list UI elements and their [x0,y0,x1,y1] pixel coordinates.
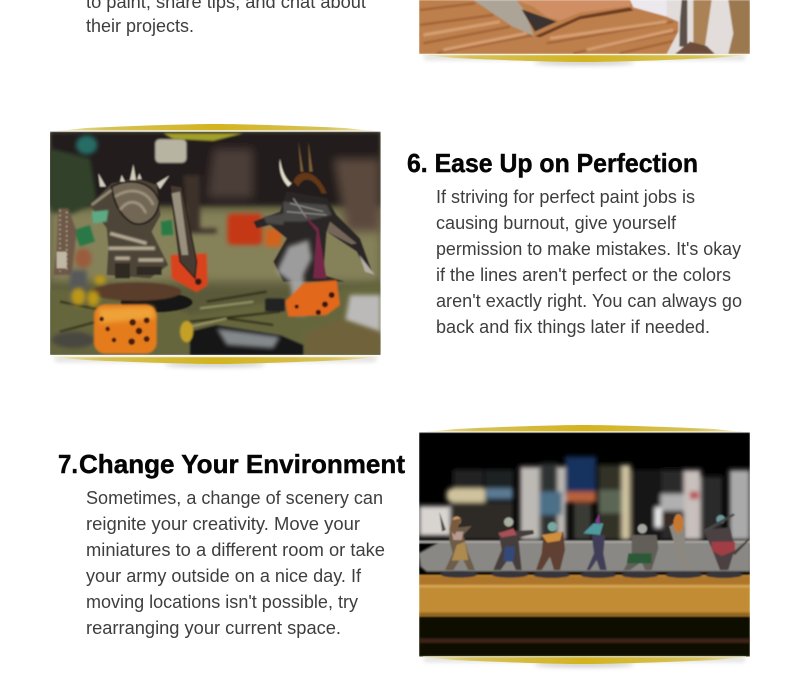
text block: step 7 body: moving locations isn't possible, try [86,592,358,612]
miniature figures [439,512,750,570]
blurred silver figure [277,240,312,315]
text block: step 7 body: miniatures to a different room or take [86,540,385,560]
wood shelf [419,575,750,617]
blurred black foreground [190,325,303,355]
bases [440,571,743,578]
orange dice background [227,213,262,245]
gold bar: below step 7 photo [421,657,748,668]
orange die right [285,280,340,317]
text block: step 6 body: if the lines aren't perfect or the colors [436,265,731,285]
bottles [419,457,750,540]
text block: step 6 body: causing burnout, give yourself [436,213,677,233]
text block: step 6 body: back and fix things later if needed. [436,317,710,337]
text block: step 7 body: your army outside on a nice day. If [86,566,362,586]
heading: step 7: Change Your Environment [79,449,405,479]
gold bar: below step 6 photo [52,357,379,368]
text block: step 6 body: permission to make mistakes. It's okay [436,239,741,259]
text block: step 7 body [86,488,385,638]
right dark orc [253,192,373,282]
blurred foreground figure [75,248,92,268]
text block: step 5 ending: their projects. [86,16,194,36]
heading: step 6: 6. Ease Up on Perfection [407,148,698,178]
text block: step 7 body: rearranging your current space. [86,618,341,638]
heading: step 7: 7. [58,449,78,479]
text block: step 6 body: aren't exactly right. You can always go [436,291,742,311]
text block: step 6 body [436,187,742,337]
photo: painted miniatures on shelf with paint bottles [419,432,750,657]
gold bar: under step 5 photo [421,55,748,66]
gold bar: above step 7 photo [427,425,742,432]
foreground die [94,304,157,354]
text block: step 5 ending [86,0,366,36]
text block: step 6 body: If striving for perfect paint jobs is [436,187,695,207]
text block: step 7 body: reignite your creativity. Move your [86,514,360,534]
photo: orc miniatures with orange dice [50,132,381,355]
left armoured orc [90,178,168,278]
tray [419,542,750,572]
gold bar: above step 6 photo [58,124,373,131]
text block: step 7 body: Sometimes, a change of scenery can [86,488,383,508]
photo: laptop on wooden table [419,0,750,54]
